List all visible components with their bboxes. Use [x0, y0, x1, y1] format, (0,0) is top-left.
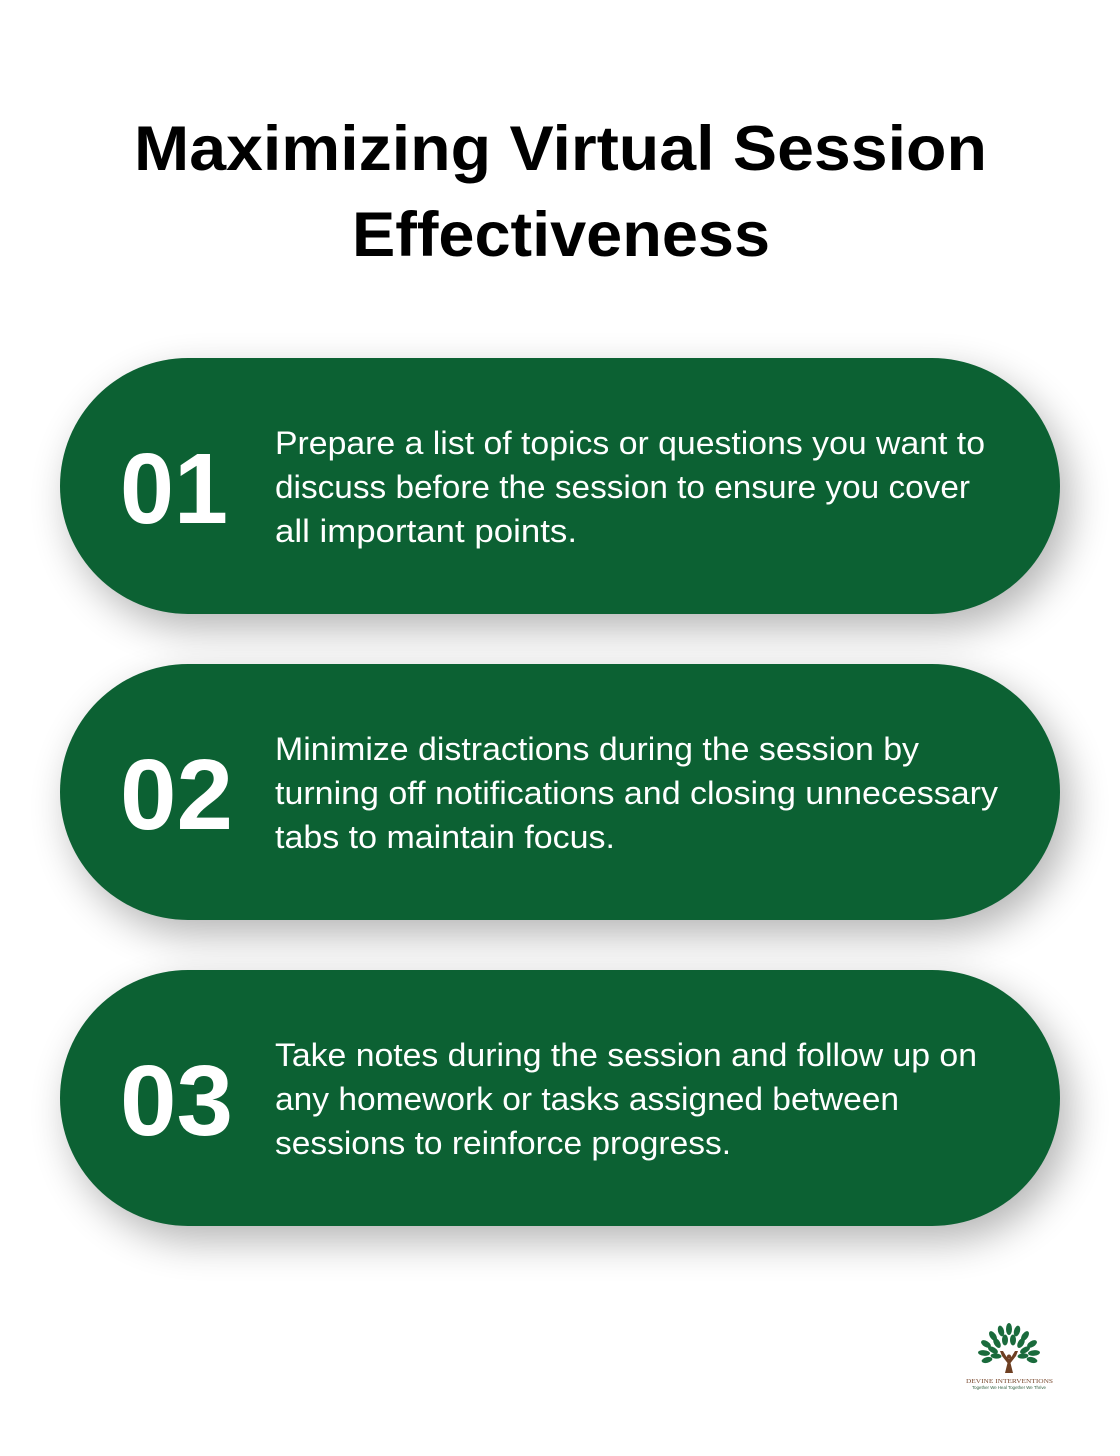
title	[134, 114, 987, 270]
panel: step 02	[60, 664, 1070, 935]
panel: step 02: turning off notifications and closing unnecessary	[275, 775, 999, 811]
panel: step 01: all important points.	[275, 513, 577, 549]
panel: step 01: Prepare a list of topics or questions you want to	[275, 425, 985, 461]
panel: step 03: sessions to reinforce progress.	[275, 1125, 731, 1161]
icon: company logo: Together We Heal Together We Thrive	[972, 1385, 1046, 1391]
panel: step 03: any homework or tasks assigned between	[275, 1081, 899, 1117]
icon: company logo: DEVINE INTERVENTIONS	[966, 1378, 1053, 1385]
title: Maximizing Virtual Session	[134, 114, 987, 184]
icon: company logo	[966, 1323, 1053, 1391]
panel: step 02: 02	[120, 739, 233, 851]
panel: step 03: Take notes during the session and follow up on	[275, 1037, 977, 1073]
panel: step 03: 03	[120, 1045, 233, 1157]
panel: step 02: tabs to maintain focus.	[275, 819, 615, 855]
panel: step 01	[60, 358, 1070, 629]
panel: step 03	[60, 970, 1070, 1241]
title: Effectiveness	[352, 200, 770, 270]
panel: step 02: Minimize distractions during the session by	[275, 731, 920, 767]
panel: step 01: 01	[120, 433, 228, 545]
panel: step 01: discuss before the session to ensure you cover	[275, 469, 970, 505]
